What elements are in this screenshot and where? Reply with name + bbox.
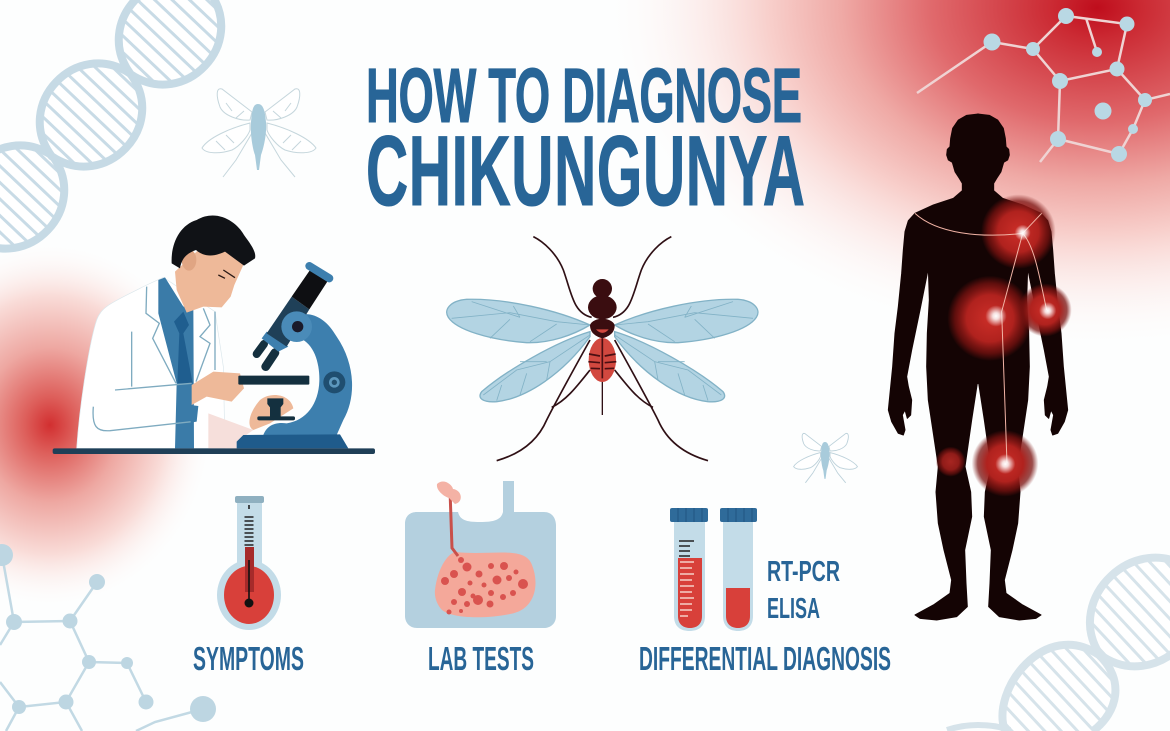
- head and thorax: [588, 279, 617, 338]
- bench: [53, 448, 375, 454]
- title: [366, 54, 805, 227]
- title: CHIKUNGUNYA: [366, 116, 805, 227]
- inflammation glows: [936, 194, 1072, 497]
- coat lines: [93, 287, 215, 431]
- RT-PCR and ELISA labels: [767, 556, 840, 625]
- nerve lines: [915, 213, 1047, 463]
- neck and face: [175, 250, 243, 313]
- silhouette: [888, 114, 1068, 620]
- hair: [172, 216, 255, 268]
- blood test tubes: [670, 508, 757, 631]
- molecule network top right: [917, 8, 1170, 162]
- shirt: [158, 277, 194, 448]
- hands and slide: [192, 372, 244, 405]
- symptoms label: SYMPTOMS: [193, 640, 304, 677]
- title: HOW TO DIAGNOSE: [366, 54, 802, 139]
- lab tests icon: flask with cells: [405, 481, 556, 628]
- microscope: [237, 266, 352, 448]
- pain points: [985, 225, 1056, 474]
- dna helix top left: [0, 0, 244, 271]
- tie: [174, 312, 193, 383]
- lab tests label: LAB TESTS: [428, 640, 534, 677]
- differential diagnosis label: DIFFERENTIAL DIAGNOSIS: [639, 640, 891, 677]
- scientist with microscope: [53, 216, 375, 454]
- legs and antennae: [497, 237, 708, 461]
- small mosquito top: [202, 89, 316, 177]
- molecule network bottom left: [0, 544, 216, 731]
- lab coat: [77, 277, 225, 448]
- RT-PCR and ELISA labels: RT-PCR: [767, 556, 840, 588]
- abdomen: [589, 338, 616, 382]
- symptoms icon: thermometer: [217, 496, 281, 630]
- RT-PCR and ELISA labels: ELISA: [767, 593, 820, 625]
- large mosquito: [447, 237, 758, 461]
- human body silhouette with joint pain: [888, 114, 1072, 620]
- dna helix bottom right: [947, 534, 1170, 731]
- wings: [447, 299, 758, 402]
- small mosquito right: [794, 433, 857, 483]
